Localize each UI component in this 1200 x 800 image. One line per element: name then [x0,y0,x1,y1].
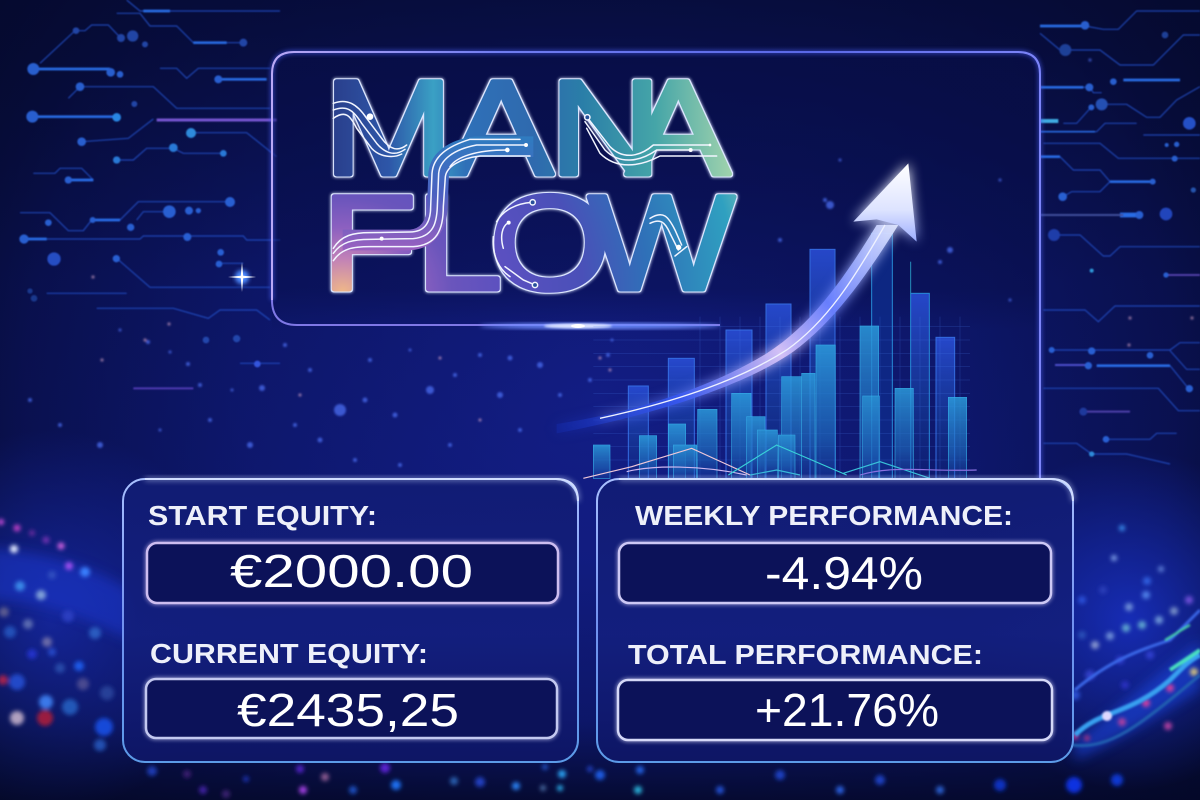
value box: weekly performance: -4.94% [765,547,923,599]
star sparkle [228,262,256,292]
chart with bars and rising arrow [557,163,977,478]
label: start equity: START EQUITY: [148,500,377,531]
scattered particles [28,58,1194,467]
value box: start equity: €2000.00 [230,545,473,597]
value box: start equity [147,543,558,603]
main logo frame [272,52,1040,480]
chart grid [593,317,970,478]
particle wave: left [0,519,130,751]
label: current equity: CURRENT EQUITY: [150,638,428,669]
circuit traces: left [19,0,280,388]
circuit traces: right [1040,11,1200,464]
particle wave: right [1066,525,1200,793]
value box: total performance [618,680,1052,740]
logo word: MANA: MANA [324,52,730,203]
rising arrow [557,163,917,433]
value box: total performance: +21.76% [755,684,939,736]
panel: performance [597,479,1073,762]
label: weekly performance: WEEKLY PERFORMANCE: [635,500,1013,531]
front bars [593,326,967,478]
logo circuit lines [333,101,717,288]
logo: Mana Flow [322,52,734,318]
back bars [628,233,955,478]
value box: weekly performance [619,543,1051,603]
value box: current equity: €2435,25 [237,684,459,736]
label: total performance: TOTAL PERFORMANCE: [628,639,983,670]
particle field: bottom strip [147,763,1006,798]
logo word: FLOW: FLOW [322,167,734,318]
mini line charts [583,445,977,478]
value box: current equity [146,679,557,738]
panel: equity [123,479,578,762]
